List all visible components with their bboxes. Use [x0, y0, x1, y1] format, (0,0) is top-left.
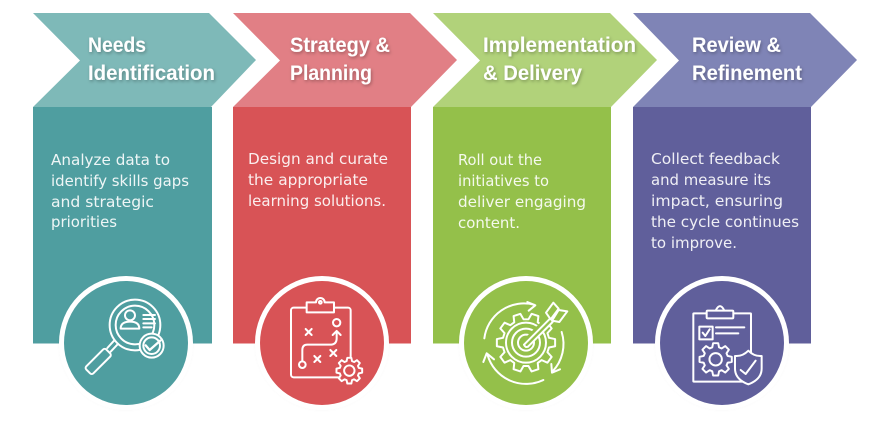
- chevron 3: [433, 13, 657, 107]
- body text 4: impact, ensuring: [651, 192, 783, 210]
- body text 3: [458, 151, 586, 232]
- body text 4: the cycle continues: [651, 213, 799, 231]
- panel 3: [433, 107, 611, 344]
- body text 3: content.: [458, 214, 520, 232]
- panel 4: [633, 107, 811, 344]
- step 2: strategy and planning: [233, 13, 457, 410]
- body text 2: Design and curate: [248, 150, 388, 168]
- icon circle 3: [459, 276, 593, 410]
- chevron 2: [233, 13, 457, 107]
- body text 4: [651, 150, 799, 252]
- body text 2: learning solutions.: [248, 192, 386, 210]
- icon circle 4: [655, 276, 789, 410]
- body text 1: priorities: [51, 213, 117, 231]
- body text 4: Collect feedback: [651, 150, 780, 168]
- body text 1: identify skills gaps: [51, 172, 189, 190]
- heading 2: Planning: [290, 62, 372, 85]
- heading 3: & Delivery: [483, 62, 582, 85]
- heading 2: Strategy &: [290, 34, 390, 57]
- heading 2: [290, 34, 390, 85]
- heading 1: [88, 34, 215, 85]
- heading 3: Implementation: [483, 34, 636, 57]
- heading 1: Identification: [88, 62, 215, 85]
- body text 3: Roll out the: [458, 151, 542, 169]
- body text 2: the appropriate: [248, 171, 368, 189]
- heading 1: Needs: [88, 34, 146, 57]
- panel 1: [33, 107, 212, 344]
- body text 2: [248, 150, 388, 210]
- step 3: implementation and delivery: [433, 13, 657, 410]
- icon: magnifier with profile and check: [85, 300, 164, 375]
- heading 4: Review &: [692, 34, 781, 57]
- body text 4: and measure its: [651, 171, 771, 189]
- icon circle 2: [255, 276, 389, 410]
- body text 1: [51, 151, 189, 231]
- heading 3: [483, 34, 636, 85]
- body text 1: and strategic: [51, 193, 154, 211]
- icon: checklist clipboard with gear and shield: [693, 306, 762, 384]
- step 1: needs identification: [33, 13, 256, 410]
- icon: clipboard with plan and gear: [291, 298, 362, 383]
- body text 3: deliver engaging: [458, 193, 586, 211]
- icon: gear with target and cycle arrows: [483, 302, 567, 384]
- heading 4: Refinement: [692, 62, 802, 85]
- icon circle 1: [59, 276, 193, 410]
- chevron 4: [633, 13, 857, 107]
- body text 3: initiatives to: [458, 172, 549, 190]
- step 4: review and refinement: [633, 13, 857, 410]
- panel 2: [233, 107, 411, 344]
- chevron 1: [33, 13, 256, 107]
- body text 4: to improve.: [651, 234, 737, 252]
- heading 4: [692, 34, 802, 85]
- body text 1: Analyze data to: [51, 151, 170, 169]
